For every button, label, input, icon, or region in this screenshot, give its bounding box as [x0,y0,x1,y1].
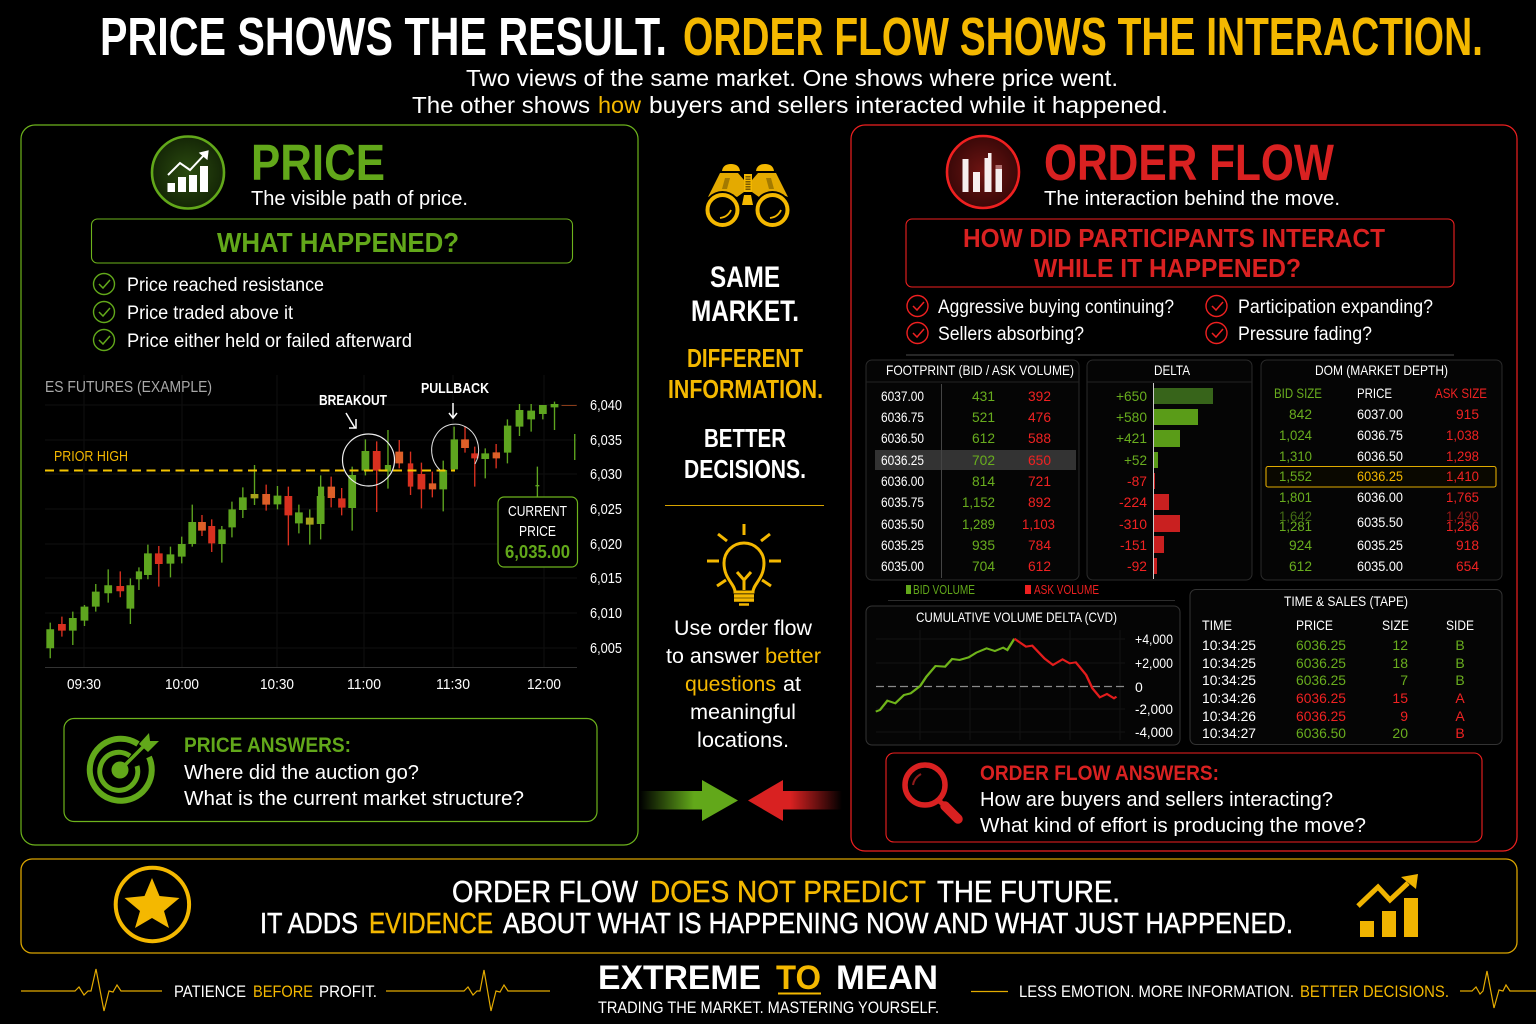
subtitle: how [598,92,641,118]
time and sales table: 6036.25 [1296,655,1346,671]
time and sales table: 20 [1392,725,1408,741]
DOM table: 915 [1456,406,1479,422]
footprint table [866,360,1079,580]
legend: bid and ask volume: BID VOLUME [913,582,975,597]
delta table: -87 [1127,473,1147,489]
checklist: price: Price traded above it [127,303,294,324]
callout: order flow answers [886,753,1482,842]
time and sales table: PRICE [1296,617,1333,633]
DOM table: 1,490 [1446,508,1479,524]
question box: how did participants interact: HOW DID PARTICIPANTS INTERACT [963,223,1385,253]
legend: bid and ask volume [906,582,1099,597]
checklist: order flow: Participation expanding? [1238,297,1433,318]
footprint table: 702 [972,452,995,468]
time and sales table: SIDE [1446,617,1474,633]
arrow: red [748,780,842,821]
footer: patience before profit: BEFORE [253,983,313,1001]
footprint table: 784 [1028,537,1051,553]
current price box: PRICE [519,523,556,540]
price axis: 6,040 [590,398,622,414]
footprint table: FOOTPRINT (BID / ASK VOLUME) [886,362,1074,378]
question box: how did participants interact: WHILE IT HAPPENED? [1034,253,1301,283]
tagline: order flow: The interaction behind the move. [1044,188,1340,210]
banner text: DOES NOT PREDICT [650,874,926,909]
CVD chart: 0 [1135,679,1143,695]
text: same market [691,261,799,328]
price axis: 6,015 [590,571,622,587]
price axis: 6,030 [590,467,622,483]
DOM table: 1,024 [1279,427,1312,443]
pullback callout [421,380,489,470]
DOM table: 1,310 [1279,448,1312,464]
CVD chart: +4,000 [1135,631,1173,647]
delta table: -92 [1127,558,1147,574]
banner: does not predict [21,859,1517,953]
text: use order flow: at [783,673,801,696]
text: better decisions [684,423,806,484]
text: use order flow [666,617,821,752]
current price box: 6,035.00 [505,542,570,562]
icon: target [90,733,159,801]
price axis: 6,010 [590,606,622,622]
icon: order flow bars badge [947,136,1019,208]
prior high level line: PRIOR HIGH [54,448,128,465]
DOM table: 6035.00 [1357,558,1403,574]
DOM table: 1,765 [1446,489,1479,505]
checklist: order flow: Pressure fading? [1238,324,1372,345]
text: same market: MARKET. [691,295,799,328]
text: same market: SAME [710,261,780,294]
text: use order flow: locations. [697,729,789,752]
time and sales table [1190,590,1502,744]
pullback callout: PULLBACK [421,380,489,397]
DOM table: 6035.25 [1357,537,1403,553]
DOM table: 1,256 [1446,518,1479,534]
subtitle: buyers and sellers interacted while it happened. [649,92,1168,118]
time axis [67,676,561,693]
callout: price answers: Where did the auction go? [184,762,419,784]
DOM table: 6036.25 [1357,468,1403,484]
breakout callout [319,392,394,486]
text: use order flow: Use order flow [674,617,813,640]
panel: price [21,125,638,845]
callout: price answers: What is the current market structure? [184,788,524,810]
CVD chart: -4,000 [1135,724,1173,740]
DOM table: 6036.00 [1357,489,1403,505]
heading: price: PRICE [251,134,385,191]
footprint table: 650 [1028,452,1051,468]
time and sales table: 10:34:25 [1202,637,1256,653]
DOM table: 918 [1456,537,1479,553]
banner text: ORDER FLOW [452,874,639,909]
time and sales table: 10:34:26 [1202,690,1256,706]
footer: patience before profit: PATIENCE [174,983,246,1001]
DOM table: 1,642 [1279,508,1312,524]
text: use order flow: to answer [666,645,759,668]
time and sales table: 6036.25 [1296,672,1346,688]
checklist: price [94,274,412,352]
delta table: -224 [1119,494,1147,510]
checklist: price: Price either held or failed afterward [127,331,412,352]
footprint table: 612 [972,430,995,446]
callout: order flow answers: What kind of effort is producing the move? [980,815,1366,837]
footprint table: 6036.75 [881,409,924,425]
footprint table: 392 [1028,388,1051,404]
footprint table: 6035.25 [881,537,924,553]
text: use order flow: meaningful [690,701,796,724]
price axis: 6,025 [590,502,622,518]
checklist: order flow [907,296,1433,345]
title: PRICE SHOWS THE RESULT. [100,7,667,67]
question box: how did participants interact [906,219,1454,287]
DOM table: 654 [1456,558,1479,574]
delta table: +580 [1116,409,1147,425]
time and sales table: B [1455,725,1465,741]
checklist: order flow: Sellers absorbing? [938,324,1084,345]
banner text: EVIDENCE [369,908,493,940]
DOM table: DOM (MARKET DEPTH) [1315,362,1448,378]
footprint table: 814 [972,473,995,489]
footer: less emotion [971,971,1536,1008]
tagline: price: The visible path of price. [251,188,468,210]
DOM table: 1,410 [1446,468,1479,484]
time and sales table: A [1455,690,1465,706]
time and sales table: B [1455,637,1465,653]
footprint table: 1,103 [1022,516,1055,532]
text: better decisions: DECISIONS. [684,454,806,484]
icon: binoculars [704,164,792,229]
breakout callout: BREAKOUT [319,392,387,409]
text: different information: INFORMATION. [668,374,823,404]
delta table: -310 [1119,516,1147,532]
footer: brand [598,959,939,1017]
footer: patience before profit [21,969,550,1011]
delta table: +421 [1116,430,1147,446]
footprint table: 588 [1028,430,1051,446]
time and sales table: B [1455,672,1465,688]
footprint table: 612 [1028,558,1051,574]
DOM table: 1,038 [1446,427,1479,443]
time and sales table: 10:34:27 [1202,725,1256,741]
time and sales table: 15 [1392,690,1408,706]
delta table: -151 [1120,537,1147,553]
time axis: 10:30 [260,676,294,693]
time and sales table: 12 [1392,637,1408,653]
footer: patience before profit: PROFIT. [319,983,377,1001]
CVD chart: +2,000 [1135,655,1173,671]
footprint table: 6037.00 [881,388,924,404]
DOM table: 6036.50 [1357,448,1403,464]
CVD chart: CUMULATIVE VOLUME DELTA (CVD) [916,609,1117,625]
delta table: +52 [1124,452,1147,468]
time axis: 10:00 [165,676,199,693]
time and sales table: 6036.25 [1296,690,1346,706]
footprint table: 721 [1028,473,1051,489]
text: use order flow: questions [685,673,776,696]
DOM table: 6035.50 [1357,514,1403,530]
price axis [590,398,622,657]
footprint table: 704 [972,558,995,574]
footer: brand: MEAN [836,959,938,997]
time and sales table: 6036.25 [1296,708,1346,724]
footer: less emotion: LESS EMOTION. MORE INFORMATION. [1019,983,1294,1001]
legend: bid and ask volume: ASK VOLUME [1034,582,1099,597]
checklist: price: Price reached resistance [127,275,324,296]
footprint table: 6035.50 [881,516,924,532]
time and sales table: 9 [1400,708,1408,724]
time and sales table: B [1455,655,1465,671]
banner text: IT ADDS [260,908,358,940]
time and sales table: A [1455,708,1465,724]
time and sales table: 6036.25 [1296,637,1346,653]
price axis: 6,035 [590,433,622,449]
center column [640,164,842,821]
price axis: 6,020 [590,537,622,553]
CVD line [876,639,1116,712]
footprint table: 1,289 [962,516,995,532]
footprint table: 892 [1028,494,1051,510]
delta bars [1154,388,1213,574]
text: better decisions: BETTER [704,423,786,453]
time and sales table: 18 [1392,655,1408,671]
time and sales table: 10:34:26 [1202,708,1256,724]
icon: rising bars [1358,874,1418,937]
question box: what happened: WHAT HAPPENED? [217,227,459,258]
footer: brand: EXTREME [598,959,761,997]
DOM table: 1,801 [1279,489,1312,505]
callout: order flow answers: How are buyers and sellers interacting? [980,789,1333,811]
arrow: green [640,780,738,821]
checklist: order flow: Aggressive buying continuing? [938,297,1174,318]
time and sales table: SIZE [1382,617,1409,633]
footprint table: 6036.50 [881,430,924,446]
DOM table: 1,298 [1446,448,1479,464]
footprint table: 431 [972,388,995,404]
DOM table: 612 [1289,558,1312,574]
DOM table: ASK SIZE [1435,385,1487,401]
footprint table: 521 [972,409,995,425]
current price box: CURRENT [508,503,567,520]
subtitle: The other shows [412,92,590,118]
footprint table: 1,152 [962,494,995,510]
icon: magnifying glass [905,765,958,819]
time and sales table: 6036.50 [1296,725,1346,741]
text: different information: DIFFERENT [687,343,803,373]
time axis: 09:30 [67,676,101,693]
banner text: THE FUTURE. [937,874,1120,909]
DOM table: 6037.00 [1357,406,1403,422]
current price box [498,497,578,567]
footprint table: 6035.00 [881,558,924,574]
CVD chart: -2,000 [1135,701,1173,717]
callout: price answers: PRICE ANSWERS: [184,734,351,757]
DOM table: PRICE [1357,385,1392,401]
delta table: +650 [1116,388,1147,404]
time axis: 12:00 [527,676,561,693]
subtitle: Two views of the same market. One shows where price went. [466,65,1118,91]
time axis: 11:00 [347,676,381,693]
delta table: DELTA [1154,362,1191,378]
price axis: 6,005 [590,641,622,657]
footprint table: 6036.25 [881,452,924,468]
DOM table: 924 [1289,537,1312,553]
DOM table: 842 [1289,406,1312,422]
footer: brand: TRADING THE MARKET. MASTERING YOURSELF. [598,999,939,1017]
banner text: ABOUT WHAT IS HAPPENING NOW AND WHAT JUST HAPPENED. [503,908,1293,940]
title [100,7,1483,67]
icon: star badge [116,868,189,941]
DOM table: 1,281 [1279,518,1312,534]
chart label: ES FUTURES (EXAMPLE) [45,379,212,396]
footprint table: 6035.75 [881,494,924,510]
question box: what happened [92,219,572,263]
delta table [1087,360,1252,580]
candlestick chart [45,375,622,693]
text: use order flow: better [765,645,821,668]
DOM table: 1,552 [1279,468,1312,484]
DOM table [1261,360,1502,580]
callout: price answers [64,718,597,822]
time and sales table: 10:34:25 [1202,672,1256,688]
CVD chart [866,606,1180,745]
heading: order flow: ORDER FLOW [1044,134,1335,191]
icon: rising chart badge [152,136,224,208]
time and sales table: 10:34:25 [1202,655,1256,671]
time axis: 11:30 [436,676,470,693]
panel: order flow [851,125,1517,851]
candles [46,402,577,658]
text: different information [668,343,823,404]
footprint table: 935 [972,537,995,553]
subtitle [412,65,1168,118]
time and sales table: 7 [1400,672,1408,688]
footprint table: 6036.00 [881,473,924,489]
callout: order flow answers: ORDER FLOW ANSWERS: [980,762,1219,785]
footer: brand: TO [776,959,821,997]
icon: light bulb [707,524,781,604]
DOM table: 6036.75 [1357,427,1403,443]
footer: less emotion: BETTER DECISIONS. [1300,983,1449,1001]
time and sales table: TIME & SALES (TAPE) [1284,593,1408,609]
banner text [260,874,1293,940]
time and sales table: TIME [1202,617,1232,633]
footprint table: 476 [1028,409,1051,425]
DOM table: BID SIZE [1274,385,1322,401]
